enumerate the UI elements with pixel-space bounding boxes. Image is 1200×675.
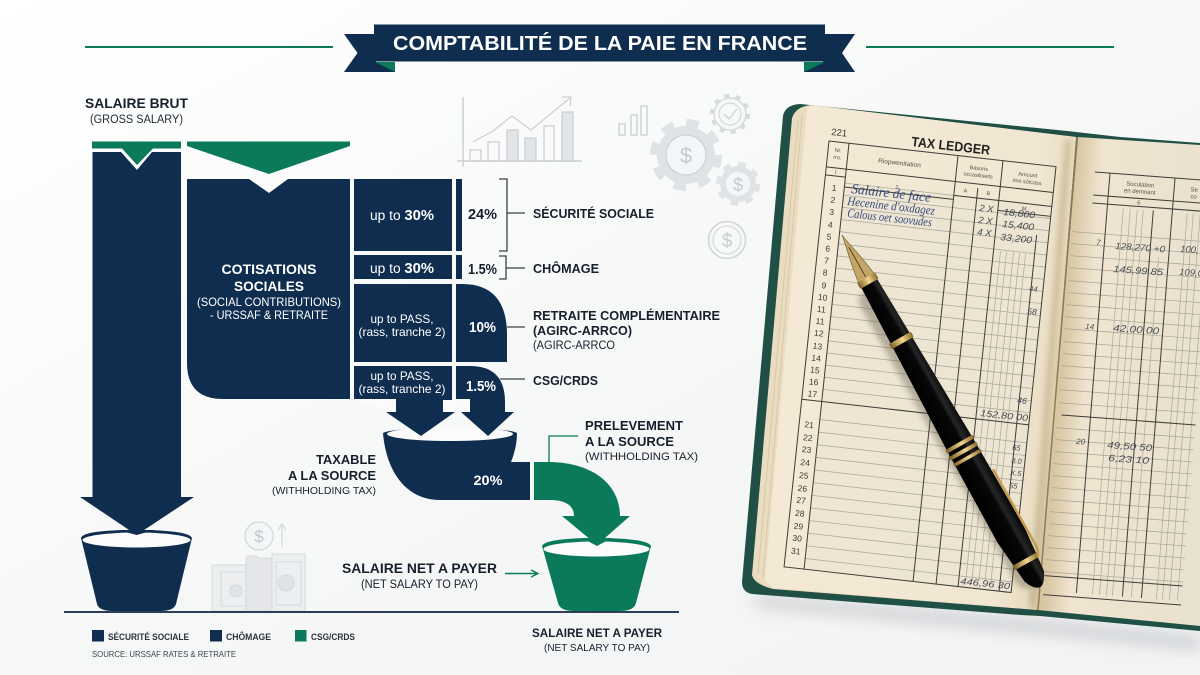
label: taxable: TAXABLE [316,452,376,467]
ledger amounts: 2 X [978,203,995,216]
right page amounts: 7 [1096,238,1101,247]
category labels: SÉCURITÉ SOCIALE [533,206,654,221]
title banner [344,24,855,72]
panel: cotisations sociales: (SOCIAL CONTRIBUTIONS) [197,295,341,309]
brackets and leaders [499,179,525,379]
right page amounts: 100, [1180,244,1199,256]
withholding tax bowl [383,427,530,500]
label: net salary bottom: SALAIRE NET A PAYER [532,626,662,640]
label: taxable [272,452,376,497]
book shadow [750,596,1200,648]
panel: cotisations sociales [187,179,350,399]
ledger amounts: 65 [1012,443,1022,453]
ledger amounts: X.5 [1009,468,1023,478]
right ledger table: Se [1190,187,1199,194]
left ledger table: ime sôtcass [1012,178,1042,187]
left ledger table: 3 [829,207,835,217]
handwritten entries: Calous oet soovudes [847,206,933,229]
panel: cotisations sociales: COTISATIONS [222,261,316,277]
legend: SÉCURITÉ SOCIALE [108,632,189,642]
left ledger table: 21 [804,419,815,430]
left ledger table: 22 [803,432,813,443]
pen barrel [855,274,1054,595]
gross salary green header bar [92,142,181,165]
gross salary bucket [81,530,192,611]
panel: rate cells: 1.5% [468,262,497,278]
left ledger table: 11 [816,304,827,315]
label: prelevement a la source: PRELEVEMENT [585,418,683,433]
label: net salary [342,561,497,591]
left ledger table: 6 [825,243,831,254]
icon: small bars [619,106,647,135]
panel: rate cells: 10% [469,320,496,336]
left ledger table: 2 [830,195,836,205]
left ledger table: 25 [799,470,809,481]
ledger amounts: 3.0 [1011,456,1023,466]
ledger amounts: 44 [1029,284,1038,294]
left ledger table: 1 [831,183,837,193]
right page amounts: 128,270 +0 [1115,241,1166,256]
left ledger table [784,141,1056,593]
panel: base cells: (rass, tranche 2) [358,325,446,339]
ledger amounts: 4 X [977,227,993,240]
left ledger table: 12 [814,328,824,339]
withholding leader line [549,436,578,462]
left ledger table: 26 [797,483,808,494]
ledger amounts: 152,80 00 [980,408,1029,423]
label: net salary: (NET SALARY TO PAY) [361,579,478,591]
left ledger table: 5 [826,231,832,242]
label: prelevement a la source: A LA SOURCE [585,434,674,449]
green pipe arrow [534,462,630,545]
ledger amounts: 55 [1009,481,1019,491]
ledger amounts: 46 [1017,395,1028,406]
source note: SOURCE: URSSAF RATES & RETRAITE [92,649,236,659]
panel: cotisations sociales: SOCIALES [234,278,304,294]
left ledger table: 31 [791,546,801,557]
pen nib [834,231,874,283]
panel: base cells: (rass, tranche 2) [358,382,446,396]
contributions green funnel [187,142,350,174]
left ledger table: A [963,188,968,195]
label: prelevement a la source [585,418,698,463]
right page [1032,137,1200,626]
left ledger table: 29 [793,521,804,532]
label: prelevement a la source: (WITHHOLDING TAX) [585,451,698,463]
left ledger table: 24 [800,457,811,468]
heading: gross salary: SALAIRE BRUT [85,95,188,111]
left ledger table: 14 [811,353,822,364]
right ledger table [1043,171,1200,605]
icon: dollar coin [708,222,746,258]
left ledger table: 17 [807,388,818,399]
panel: rate cells: 24% [468,207,497,223]
ledger amounts: 58 [1027,306,1038,317]
legend: CHÔMAGE [226,631,271,642]
left ledger table: 8 [822,267,828,278]
category labels: CSG/CRDS [533,373,598,388]
category labels: (AGIRC-ARRCO) [533,323,632,338]
arrow: csg to bowl: 1.5% [466,379,496,395]
label: taxable: (WITHHOLDING TAX) [272,485,376,497]
left ledger table: 4 [827,219,833,230]
handwritten entries: Hecenine d'oxdagez [846,194,936,218]
icon: banknotes: $ [254,527,264,546]
panel: base cells: up to PASS, [370,312,434,326]
panel: cotisations sociales: - URSSAF & RETRAITE [210,308,328,322]
panel: base cells: up to PASS, [370,369,434,383]
label: net salary bottom [532,626,662,654]
left page [752,105,1076,610]
left ledger table: 11 [815,316,825,327]
icon: growth chart [457,97,582,167]
right page amounts: 14 [1085,322,1095,332]
gross salary arrow [80,152,194,535]
left ledger table: 16 [808,376,819,387]
panel: rate cells [456,179,507,362]
right page amounts: 49,50 50 [1107,440,1153,454]
arrow: contributions to bowl [354,399,455,436]
left page: TAX LEDGER [911,134,991,158]
arrow: csg to bowl [443,366,514,436]
legend [92,630,355,642]
icon: check gear [712,96,748,132]
net salary bucket [542,538,651,611]
left ledger table: Nr. [834,148,842,155]
legend: CSG/CRDS [311,632,355,642]
heading: gross salary: (GROSS SALARY) [90,114,183,126]
left ledger table: M [1022,206,1027,213]
left ledger table: Basons [969,165,989,173]
left ledger table: 10 [817,292,828,303]
right page amounts: 6,23 10 [1108,453,1150,467]
right page amounts: 42,00 00 [1113,323,1160,337]
ledger amounts: 2 X [977,215,994,228]
left ledger table: 13 [812,341,823,352]
handwritten entries [846,182,936,229]
header decorative lines [85,46,1114,48]
baseline [64,611,679,613]
icon: banknotes [212,522,305,611]
label: net salary bottom: (NET SALARY TO PAY) [544,642,650,654]
left page: 221 [831,127,848,140]
right page amounts: 20 [1075,437,1086,447]
right page amounts [1075,238,1200,467]
category labels: RETRAITE COMPLÉMENTAIRE [533,308,720,323]
handwritten entries: Salaire de face [851,182,932,206]
ledger amounts: 446,96 30 [960,576,1011,591]
category labels [533,206,720,388]
ledger amounts: 18,800 [1003,207,1036,221]
left ledger table: 9 [821,280,827,291]
left ledger table: 2 [895,185,899,191]
right ledger table: Soculation [1126,181,1154,189]
right ledger table: co [1190,194,1198,201]
ledger amounts [960,203,1038,591]
icon: medium dollar gear: $ [733,175,743,195]
label: taxable: A LA SOURCE [288,468,376,483]
ledger amounts: 33,200 [1000,232,1033,246]
withholding tax bowl: 20% [474,472,503,488]
category labels: (AGIRC-ARRCO [533,340,615,352]
left ledger table: B [986,191,991,197]
icon: large dollar gear: $ [680,143,692,168]
heading: gross salary [85,95,188,126]
left ledger table: 23 [801,444,812,455]
left ledger table: 30 [792,533,803,544]
left ledger table: 15 [810,365,820,376]
left ledger table: Amount [1018,172,1038,180]
panel: base cells [354,179,452,412]
right ledger table: 6 [1137,200,1141,207]
label: net salary: SALAIRE NET A PAYER [342,561,497,576]
left ledger table: 28 [795,508,805,519]
green book cover [742,104,1200,631]
title banner: COMPTABILITÉ DE LA PAIE EN FRANCE [393,32,807,55]
category labels: CHÔMAGE [533,261,599,276]
right ledger table: en demnant [1124,188,1156,197]
left ledger table: I [835,170,837,176]
arrow: net salary to bucket [505,570,538,577]
panel: base cells: up to 30% [370,208,434,224]
left ledger table: 27 [796,495,807,506]
left ledger table: occasiliseits [963,171,993,181]
icon: large dollar gear [655,124,717,186]
icon: medium dollar gear [719,165,757,203]
panel: base cells: up to 30% [370,261,434,277]
right page amounts: 145,99 85 [1113,264,1164,279]
left ledger table: 7 [824,255,830,266]
icon: dollar coin: $ [722,231,733,252]
left ledger table: rro. [833,155,842,162]
ledger book photo [742,104,1200,648]
left ledger table: Riopwenitation [878,158,922,169]
fountain pen [825,227,1055,596]
ledger amounts: 15,400 [1002,219,1035,233]
